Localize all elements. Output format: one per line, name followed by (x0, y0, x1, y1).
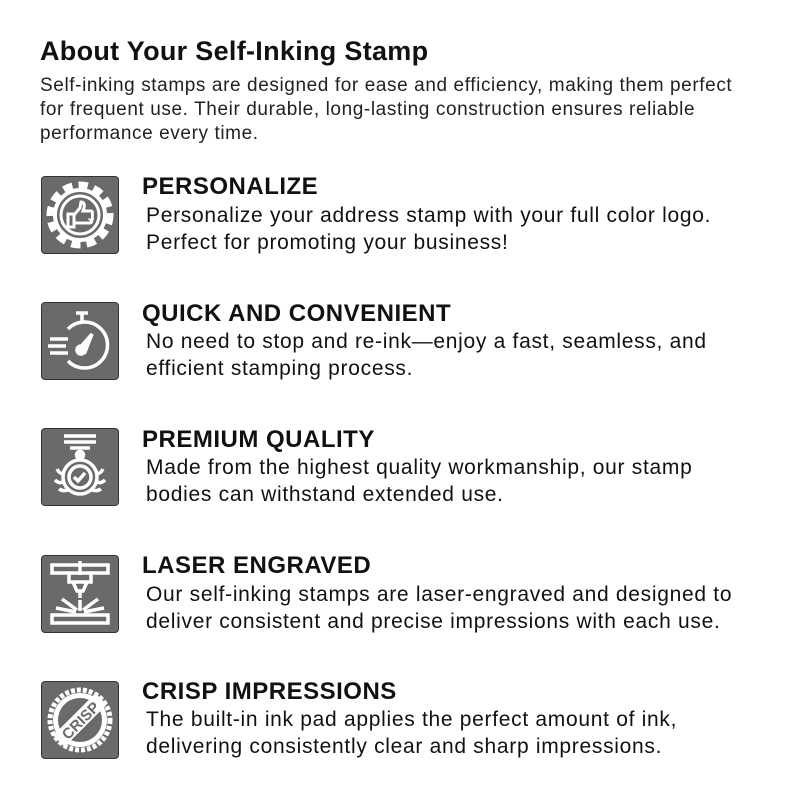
text: laser: deliver consistent and precise impressions with each use. (146, 610, 720, 633)
text: personalize (146, 204, 711, 254)
icon: laser (41, 555, 119, 633)
text: laser: Our self-inking stamps are laser-engraved and designed to (146, 583, 732, 606)
text: personalize: Personalize your address stamp with your full color logo. (146, 204, 711, 227)
icon: stopwatch (41, 302, 119, 380)
text: quick: No need to stop and re-ink—enjoy a fast, seamless, and (146, 330, 707, 353)
text: premium: Made from the highest quality workmanship, our stamp (146, 456, 692, 479)
icon: gear thumbs up (41, 176, 119, 254)
text: crisp: The built-in ink pad applies the perfect amount of ink, (146, 708, 677, 731)
text: crisp: delivering consistently clear and sharp impressions. (146, 735, 662, 758)
icon: crisp seal: CRISP (59, 699, 103, 743)
text: personalize: Perfect for promoting your business! (146, 231, 509, 254)
heading: quick: QUICK AND CONVENIENT (142, 300, 451, 327)
heading: premium: PREMIUM QUALITY (142, 426, 375, 453)
text: laser (146, 583, 732, 633)
text: premium (146, 456, 692, 506)
text: quick: efficient stamping process. (146, 357, 413, 380)
intro text (40, 75, 732, 144)
intro text: performance every time. (40, 123, 259, 144)
text: quick (146, 330, 707, 380)
heading: laser: LASER ENGRAVED (142, 552, 371, 579)
heading: crisp: CRISP IMPRESSIONS (142, 678, 397, 705)
icon: medal (41, 428, 119, 506)
text: crisp (146, 708, 677, 758)
intro text: for frequent use. Their durable, long-lasting construction ensures reliable (40, 99, 695, 120)
intro text: Self-inking stamps are designed for ease and efficiency, making them perfect (40, 75, 732, 96)
text: premium: bodies can withstand extended use. (146, 483, 504, 506)
heading: personalize: PERSONALIZE (142, 173, 318, 200)
title: About Your Self-Inking Stamp (40, 36, 428, 66)
icon: crisp seal (41, 681, 119, 759)
